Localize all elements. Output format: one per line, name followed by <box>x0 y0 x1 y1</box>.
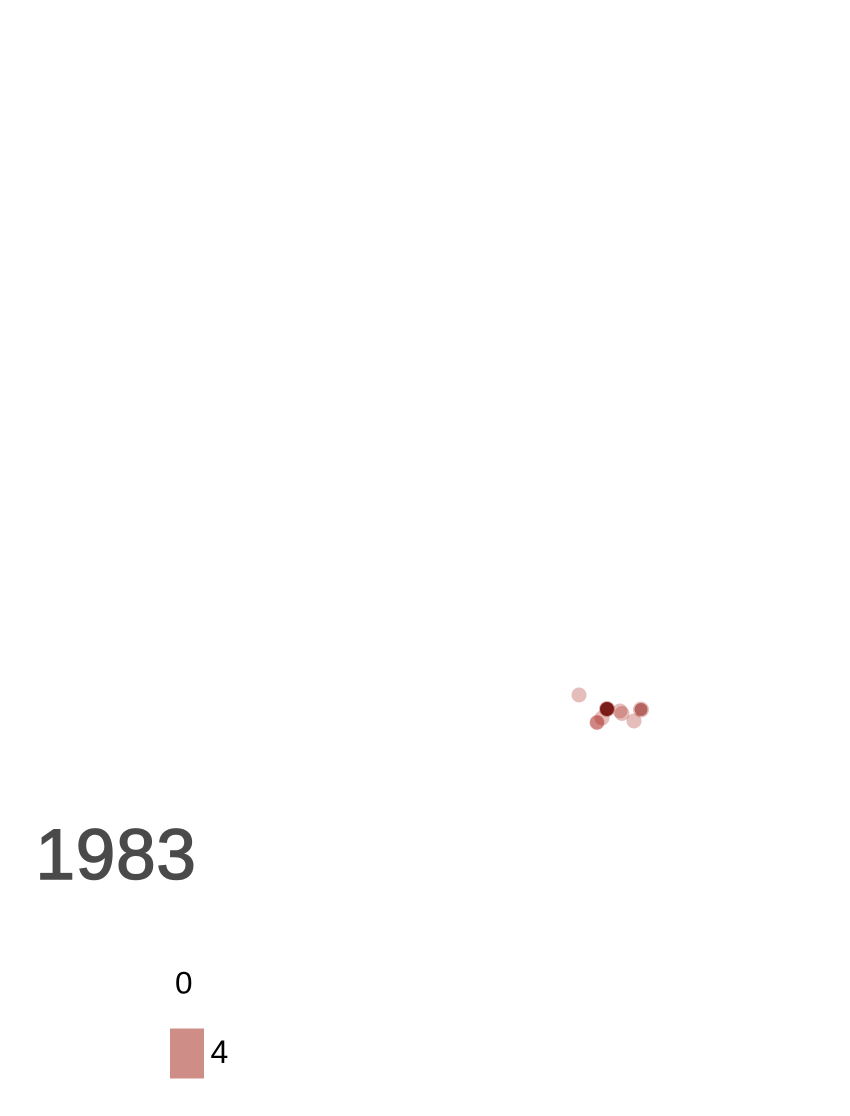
legend <box>170 964 228 1078</box>
legend label: 0: 0 <box>175 964 193 1000</box>
legend swatch <box>170 1028 204 1078</box>
map data points <box>572 688 649 730</box>
year heading: 1983 <box>36 816 197 895</box>
legend label: 4: 4 <box>210 1034 228 1070</box>
